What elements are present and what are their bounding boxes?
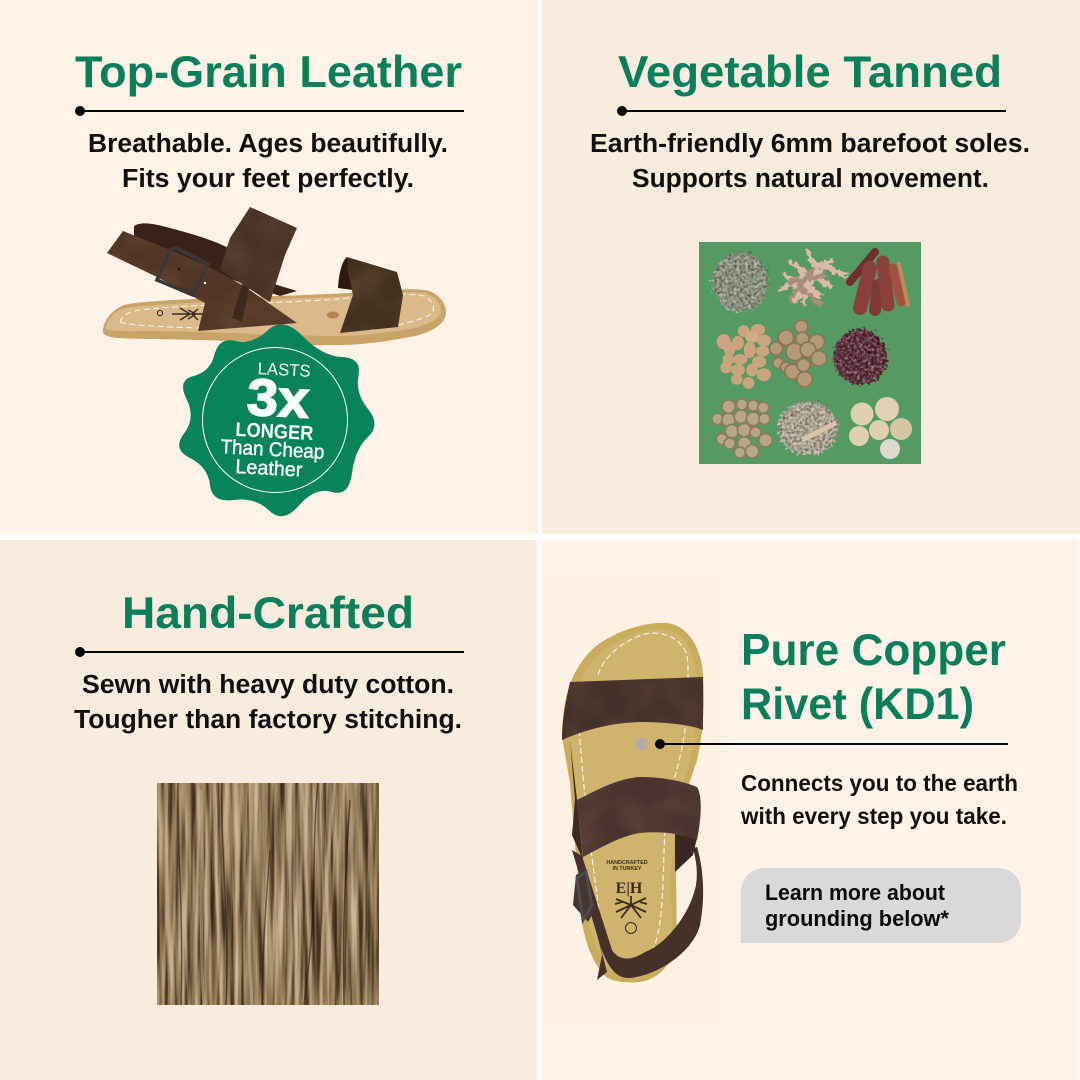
sole: [562, 623, 704, 982]
body text: [590, 130, 1030, 193]
front strap: [338, 257, 353, 290]
title: Top-Grain Leather: Top-Grain Leather: [75, 48, 462, 97]
body text: Sewn with heavy duty cotton.: [82, 671, 454, 699]
callout: learn more about grounding: grounding below*: [765, 906, 949, 931]
title: Hand-Crafted: Hand-Crafted: [122, 589, 414, 638]
inner shadow: [675, 834, 697, 872]
title: Vegetable Tanned: Vegetable Tanned: [618, 48, 1002, 97]
icon: root tree logo: [615, 896, 647, 918]
label: handcrafted in turkey: [606, 860, 648, 897]
badge: lasts 3x longer: Than Cheap: [220, 436, 325, 464]
panel: top-grain leather: [0, 0, 538, 534]
divider with dot: [617, 106, 1006, 116]
title: Pure Copper Rivet (KD1): Pure Copper: [741, 626, 1006, 675]
badge: lasts 3x longer: LASTS: [257, 359, 311, 381]
label: handcrafted in turkey: IN TURKEY: [612, 866, 642, 872]
pile: grey green herb: [712, 252, 768, 312]
panel: vegetable tanned: [542, 0, 1080, 534]
buckle: [573, 870, 596, 922]
icon: tree logo on footbed: [172, 308, 205, 320]
strap 2: [577, 777, 701, 857]
heel loop: [134, 223, 297, 296]
strap 1: [562, 677, 703, 740]
divider with dot: [75, 647, 464, 657]
body text: Tougher than factory stitching.: [74, 706, 462, 734]
callout line with dot: [655, 739, 1008, 749]
callout: learn more about grounding: Learn more about: [765, 880, 946, 905]
callout: learn more about grounding: [741, 868, 1021, 943]
stitching: [579, 633, 688, 955]
divider with dot: [75, 106, 464, 116]
pile: tan caps: [769, 320, 827, 387]
body text: with every step you take.: [740, 803, 1007, 829]
icon: copper rivet: [636, 738, 648, 750]
panel: pure copper rivet: [542, 540, 1080, 1080]
panel: hand-crafted: [0, 540, 537, 1080]
icon: side view leather sandal: [103, 207, 446, 345]
pile: dark maroon flakes: [833, 329, 887, 385]
badge: lasts 3x longer: LONGER: [235, 419, 314, 445]
body text: [74, 671, 462, 734]
pile: tan nuts: [717, 324, 771, 389]
pile: pink shavings: [780, 252, 845, 305]
photo: brown cotton thread: [157, 783, 379, 1005]
metal buckle: [157, 248, 208, 295]
body text: Breathable. Ages beautifully.: [88, 130, 448, 158]
badge: lasts 3x longer: Leather: [235, 456, 303, 482]
title: Pure Copper Rivet (KD1): [741, 626, 1006, 729]
pile: mushroom caps: [712, 399, 772, 458]
pile: white balls: [849, 397, 912, 459]
side edge: [570, 740, 583, 860]
photo: nine tanning ingredients on green: [699, 242, 921, 464]
title: Pure Copper Rivet (KD1): Rivet (KD1): [741, 680, 974, 729]
body text: [88, 130, 448, 193]
body text: Fits your feet perfectly.: [122, 165, 414, 193]
label: handcrafted in turkey: E|H: [616, 880, 643, 897]
heel strap: [572, 847, 703, 978]
body text: [740, 770, 1018, 829]
badge: lasts 3x longer: [179, 324, 374, 516]
body text: Supports natural movement.: [632, 165, 989, 193]
icon: copper rivet: [327, 312, 339, 318]
label: handcrafted in turkey: HANDCRAFTED: [606, 860, 648, 866]
pile: white shreds: [778, 401, 838, 455]
body text: Connects you to the earth: [741, 770, 1018, 796]
buckle strap: [107, 231, 297, 331]
pile: red bark sticks: [850, 252, 908, 310]
body text: Earth-friendly 6mm barefoot soles.: [590, 130, 1030, 158]
middle strap: [220, 207, 297, 302]
badge: lasts 3x longer: 3x: [246, 369, 311, 430]
icon: top view leather sandal: [545, 575, 725, 1030]
